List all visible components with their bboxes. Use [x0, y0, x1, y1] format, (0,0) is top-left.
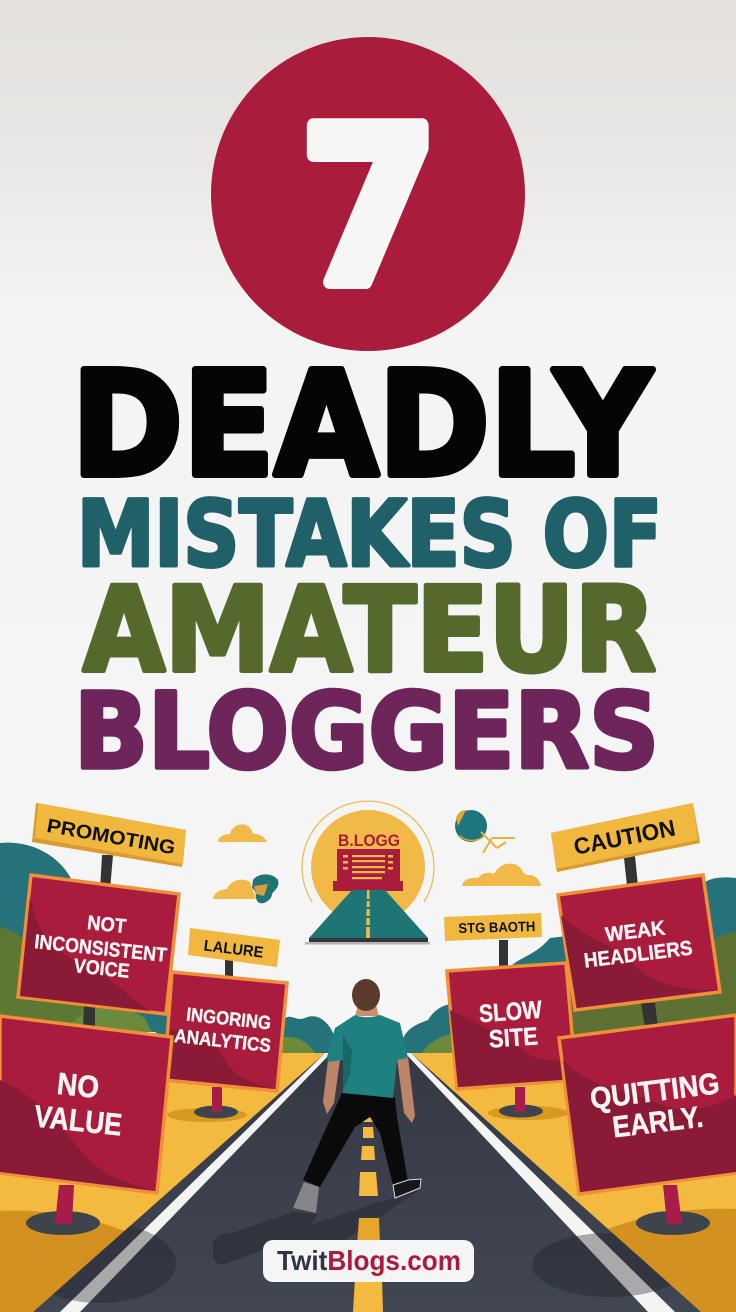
logo road	[305, 890, 430, 944]
website badge: TwitBlogs.com	[277, 1245, 461, 1276]
person walking on the road	[293, 979, 421, 1213]
sign: NO VALUE: VALUE	[33, 1099, 124, 1143]
sign: QUITTING EARLY: EARLY.	[611, 1101, 705, 1144]
sign: CAUTION	[551, 803, 700, 886]
arms	[323, 1060, 340, 1114]
sign: SLOW SITE	[447, 963, 576, 1120]
sign: NO VALUE: NO	[55, 1066, 101, 1105]
blog road logo	[302, 801, 434, 944]
hills: right	[401, 877, 736, 1053]
sign: PROMOTING	[32, 803, 186, 1028]
icon: teal balloon with strings	[455, 810, 515, 853]
shirt shading	[343, 1035, 352, 1090]
blog road logo: B.LOGG	[338, 832, 400, 850]
sign: PROMOTING: PROMOTING	[45, 815, 177, 859]
sign: NOT INCONSISTENT VOICE: VOICE	[73, 955, 131, 983]
sign: NOT INCONSISTENT VOICE: NOT	[86, 912, 127, 938]
sign: INGORING ANALYTICS: ANALYTICS	[173, 1026, 272, 1057]
sign: LALURE	[188, 928, 280, 978]
road	[24, 1053, 701, 1312]
sign: CAUTION: CAUTION	[571, 815, 678, 860]
sign: STG BAOTH: STG BAOTH	[458, 918, 536, 936]
sign: WEAK HEADLIERS	[558, 875, 720, 1028]
hills: left	[0, 843, 336, 1053]
sign: WEAK HEADLIERS: WEAK	[604, 916, 667, 947]
trousers	[303, 1093, 408, 1187]
blog building	[333, 849, 403, 891]
right shoe	[393, 1179, 421, 1198]
cloud: lower left	[213, 880, 256, 899]
cloud: upper left	[218, 824, 267, 842]
sign: QUITTING EARLY: QUITTING	[588, 1067, 721, 1116]
sign: QUITTING EARLY	[559, 1015, 736, 1235]
sign: STG BAOTH	[444, 913, 542, 966]
hero circle with number 7	[211, 37, 525, 351]
head	[352, 979, 380, 1011]
sign: LALURE: LALURE	[203, 937, 264, 962]
neck	[355, 1005, 379, 1016]
sign: NO VALUE	[0, 1016, 172, 1235]
shirt	[327, 1015, 408, 1098]
title: DEADLY: DEADLY	[72, 340, 653, 508]
sign: SLOW SITE: SLOW	[478, 996, 543, 1028]
road shadows	[24, 1190, 688, 1303]
website badge	[263, 1240, 474, 1282]
sign: SLOW SITE: SITE	[488, 1022, 539, 1054]
cloud: right	[462, 864, 541, 886]
hero circle with number 7: 7	[300, 82, 438, 333]
left shoe	[293, 1182, 319, 1213]
title: BLOGGERS: BLOGGERS	[74, 670, 659, 792]
sign: INGORING ANALYTICS: INGORING	[185, 1005, 272, 1034]
sign: INGORING ANALYTICS	[164, 972, 287, 1122]
ground	[0, 1053, 736, 1312]
sign: WEAK HEADLIERS: HEADLIERS	[583, 936, 694, 973]
title: AMATEUR: AMATEUR	[83, 564, 656, 698]
road centre dashes	[353, 1116, 383, 1312]
sign: NOT INCONSISTENT VOICE: INCONSISTENT	[33, 931, 168, 967]
icon: teal falling figure	[252, 874, 278, 903]
sign: NOT INCONSISTENT VOICE	[18, 875, 179, 1014]
